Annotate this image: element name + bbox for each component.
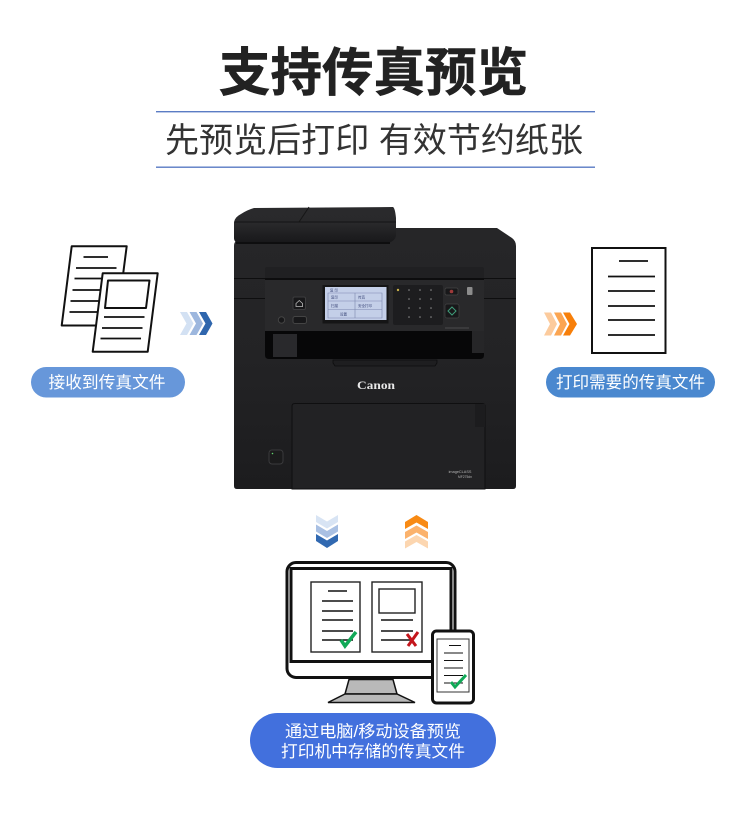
label: preview on computer or mobile: 通过电脑/移动设备预览	[285, 722, 461, 741]
arrow: blue right chevrons	[180, 312, 212, 335]
document feeder	[234, 207, 396, 243]
keypad	[393, 285, 443, 325]
icon: received fax documents	[62, 246, 158, 352]
output slot	[265, 331, 484, 359]
rejected preview page	[372, 582, 422, 652]
printer: 设置	[340, 312, 348, 316]
arrow: orange up chevrons	[405, 515, 428, 548]
brand logo: Canon	[357, 378, 395, 392]
label: print needed file	[546, 367, 715, 398]
printer: 复印	[331, 294, 338, 300]
label: preview on computer or mobile: 打印机中存储的传真文件	[281, 742, 465, 761]
printer: imageCLASS	[449, 470, 472, 474]
touch screen	[322, 285, 388, 324]
printer	[234, 207, 516, 489]
icon: computer monitor with previews	[287, 562, 455, 702]
printer body	[234, 228, 516, 489]
icon: printed document	[592, 248, 666, 353]
control panel	[265, 267, 484, 280]
good preview page	[311, 582, 360, 652]
subtitle band: 先预览后打印 有效节约纸张	[165, 122, 583, 160]
paper tray	[292, 404, 485, 489]
printer: 安全打印	[358, 303, 372, 308]
home button	[293, 297, 306, 310]
stop and start buttons	[445, 288, 458, 295]
label: received fax file: 接收到传真文件	[48, 373, 166, 392]
side seams	[234, 278, 516, 298]
printer: 复 印	[330, 288, 338, 292]
monitor stand	[345, 680, 397, 694]
printer: 扫描	[331, 303, 338, 308]
arrow: orange right chevrons	[544, 312, 577, 336]
icon: phone with preview	[432, 631, 474, 703]
title: 支持传真预览	[219, 45, 528, 103]
printer: 传真	[358, 294, 366, 300]
label: print needed file: 打印需要的传真文件	[556, 373, 705, 392]
printer: MF275dn	[458, 475, 472, 479]
arrow: blue down chevrons	[316, 515, 338, 548]
label: received fax file	[31, 367, 185, 398]
power button	[269, 450, 283, 464]
label: preview on computer or mobile	[250, 713, 496, 768]
